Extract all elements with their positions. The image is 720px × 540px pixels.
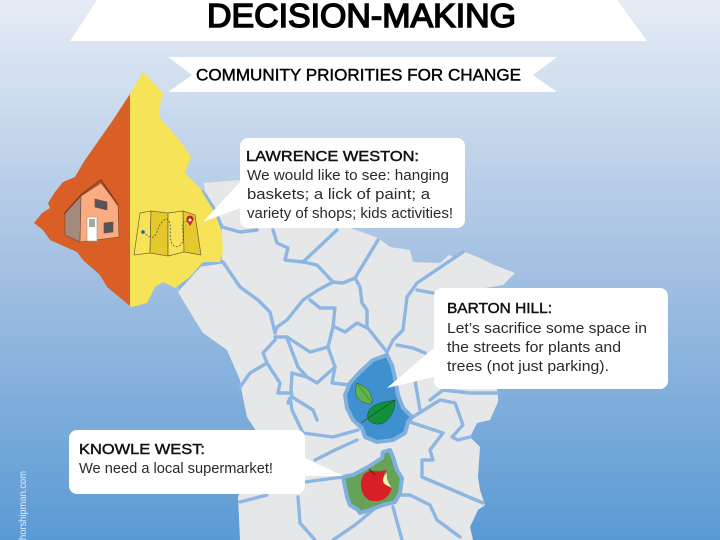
yellow half bbox=[130, 72, 223, 307]
icon: bitten apple bbox=[361, 469, 392, 501]
orange half bbox=[34, 94, 130, 306]
map of neighbourhoods bbox=[178, 180, 515, 540]
callout body: the streets for plants and bbox=[447, 340, 621, 356]
callout heading: KNOWLE WEST: bbox=[79, 441, 205, 458]
callout body bbox=[247, 168, 453, 222]
icon: house bbox=[64, 180, 119, 242]
map roads bbox=[180, 192, 498, 540]
callout body: We need a local supermarket! bbox=[79, 461, 273, 477]
callout body: We would like to see: hanging bbox=[247, 168, 449, 184]
callout heading: LAWRENCE WESTON: bbox=[246, 148, 419, 165]
callout body: Let’s sacrifice some space in bbox=[447, 321, 647, 337]
callout body: trees (not just parking). bbox=[447, 359, 609, 375]
icon: small leaf bbox=[356, 383, 372, 404]
callout: Lawrence Weston bbox=[203, 138, 465, 228]
title banner bbox=[70, 0, 647, 41]
callout body: baskets; a lick of paint; a bbox=[247, 187, 431, 203]
Lawrence Weston area bbox=[34, 72, 223, 307]
Knowle West area bbox=[343, 450, 402, 513]
callout: Knowle West bbox=[69, 430, 343, 494]
callout heading: BARTON HILL: bbox=[447, 300, 552, 317]
callout body: variety of shops; kids activities! bbox=[247, 206, 453, 222]
icon: large leaf bbox=[361, 400, 395, 424]
callout: Barton Hill bbox=[387, 288, 668, 389]
Barton Hill area bbox=[345, 355, 412, 442]
map land bbox=[178, 180, 515, 540]
callout body bbox=[447, 321, 647, 375]
subtitle: COMMUNITY PRIORITIES FOR CHANGE bbox=[196, 66, 521, 84]
icon: folded map bbox=[134, 211, 201, 256]
credit text: horshipman.com bbox=[17, 471, 29, 540]
subtitle ribbon bbox=[168, 57, 557, 92]
